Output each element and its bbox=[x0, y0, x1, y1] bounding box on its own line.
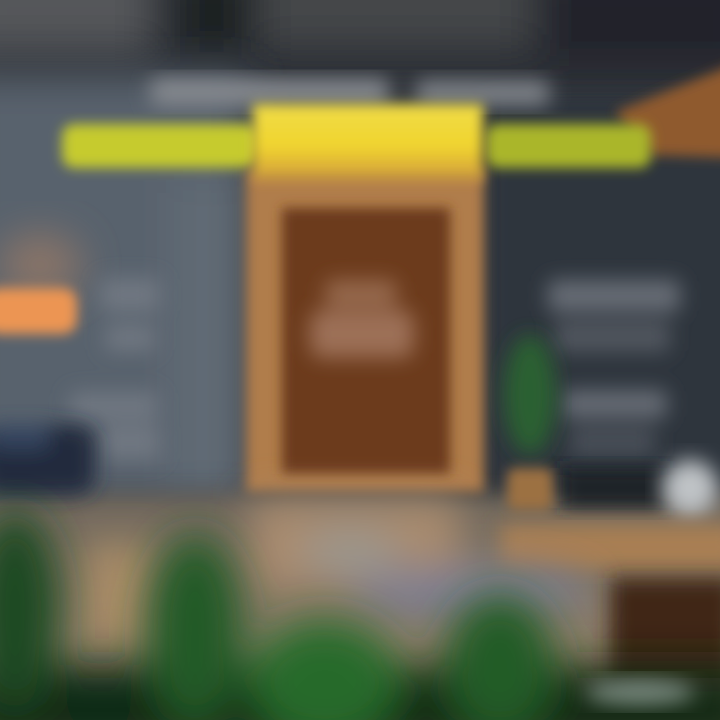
left wall text blocks bbox=[70, 278, 160, 460]
blurred door label bbox=[310, 280, 414, 358]
right wall bbox=[485, 95, 720, 505]
door frame bbox=[246, 170, 484, 492]
floor bbox=[0, 495, 720, 720]
floor highlights bbox=[85, 500, 590, 645]
wooden beam top right bbox=[615, 62, 720, 158]
orange glow with left label bbox=[0, 233, 82, 334]
left wall bbox=[0, 75, 250, 505]
wooden table bbox=[500, 524, 720, 688]
pale leaf bottom right bbox=[585, 679, 695, 705]
dark cabinet right bbox=[560, 468, 670, 508]
ceiling bbox=[0, 0, 720, 90]
foreground plants bbox=[0, 510, 720, 720]
door panel bbox=[282, 208, 450, 474]
sofa left bbox=[0, 425, 95, 495]
yellow banner left bbox=[62, 124, 257, 168]
white vase on table bbox=[662, 460, 718, 516]
yellow door header bbox=[253, 104, 483, 180]
right wall text blocks bbox=[548, 280, 680, 456]
potted plant bbox=[504, 335, 556, 510]
blurred title bbox=[150, 78, 550, 106]
yellow banner right bbox=[486, 124, 651, 168]
